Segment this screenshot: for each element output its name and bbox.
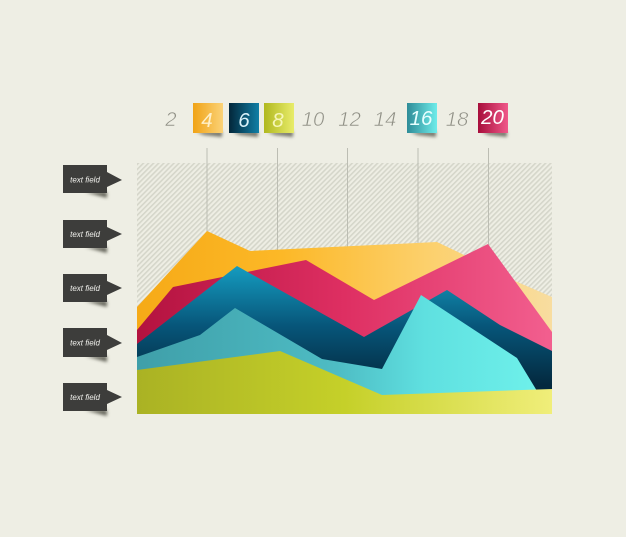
text field tags xyxy=(63,165,122,416)
label 14: 14 xyxy=(374,108,396,131)
area: pink series xyxy=(137,244,552,414)
area: teal series xyxy=(137,295,537,414)
tag 1: text field xyxy=(70,176,100,184)
tag 5 xyxy=(63,383,122,416)
area: orange series xyxy=(137,231,552,414)
badge 4 xyxy=(193,103,223,137)
tag 1 xyxy=(63,165,122,198)
badge 16: 16 xyxy=(410,107,433,130)
badge 20 xyxy=(478,103,508,137)
vertical guide lines xyxy=(207,148,488,250)
badge 4: 4 xyxy=(201,109,213,132)
tag 2 xyxy=(63,220,122,253)
tag 4 xyxy=(63,328,122,362)
badge 20: 20 xyxy=(480,106,504,129)
label 10: 10 xyxy=(302,108,325,131)
label 12: 12 xyxy=(338,108,361,131)
badge 16 xyxy=(407,103,437,137)
tag 4: text field xyxy=(70,338,100,348)
label 18: 18 xyxy=(446,108,469,131)
tag 5: text field xyxy=(70,393,100,402)
area: dark blue series xyxy=(137,266,552,414)
badge 8 xyxy=(264,103,294,137)
area: green series xyxy=(137,351,552,414)
badge 8: 8 xyxy=(272,109,284,132)
axis number labels xyxy=(164,103,508,137)
hatched chart background xyxy=(137,163,552,414)
badge 6: 6 xyxy=(238,109,250,132)
label 2: 2 xyxy=(164,108,177,131)
tag 3 xyxy=(63,274,122,307)
area chart xyxy=(137,231,552,414)
tag 3: text field xyxy=(70,284,100,293)
badge 6 xyxy=(229,103,259,137)
tag 2: text field xyxy=(70,230,100,239)
